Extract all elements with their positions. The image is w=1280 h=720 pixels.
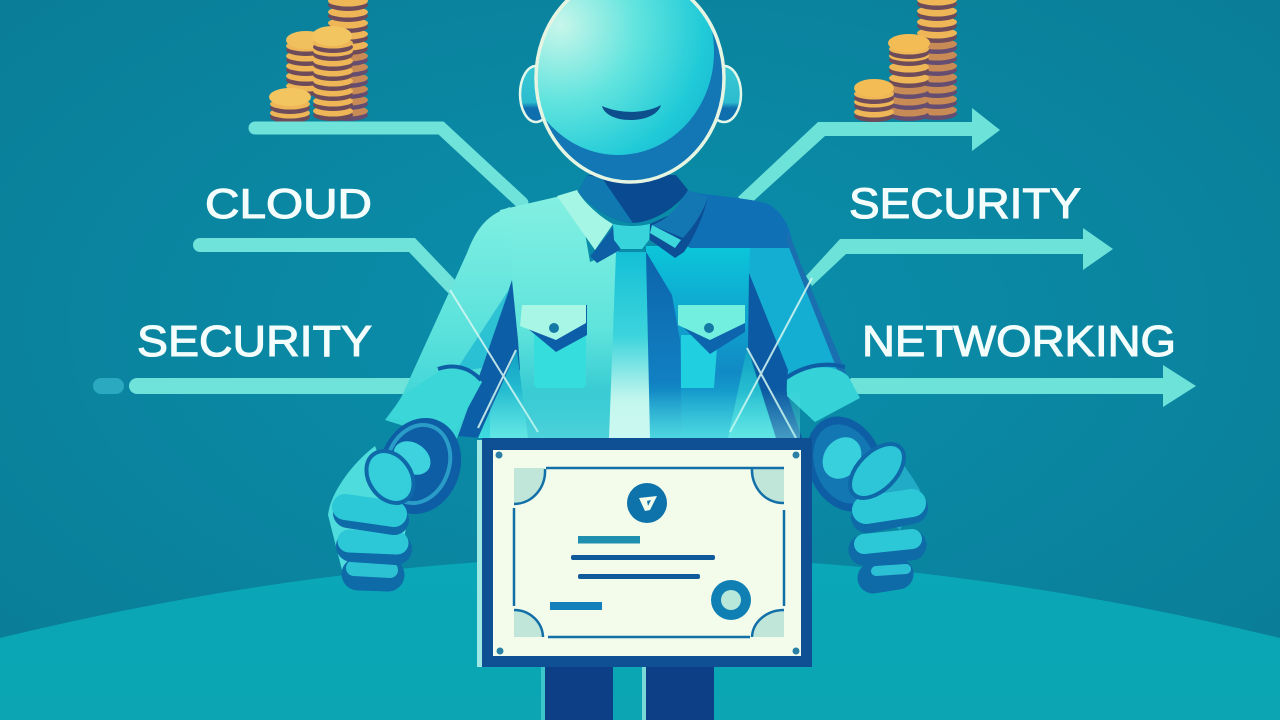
right ear (707, 66, 741, 122)
right under-arm shade (748, 273, 802, 438)
label: NETWORKING: NETWORKING (862, 317, 1176, 366)
inner border (514, 468, 784, 637)
cuff (792, 405, 898, 523)
left pocket (520, 305, 587, 388)
right lower torso fill (728, 348, 776, 438)
arrow: middle left (200, 245, 452, 287)
arrow: lower left (129, 378, 424, 394)
mouth (602, 105, 661, 120)
neck (578, 175, 688, 223)
certificate frame edge (477, 440, 483, 667)
left lower sleeve (388, 369, 482, 430)
thumb (840, 434, 914, 508)
certificate (477, 438, 812, 667)
right lower sleeve (787, 367, 860, 422)
torso right (646, 246, 752, 440)
finger 2 (864, 539, 912, 550)
right cuff crease (786, 365, 845, 378)
ground hill (0, 556, 1280, 720)
left arm (385, 207, 512, 442)
left cuff crease (438, 366, 481, 380)
finger 1 (866, 503, 912, 517)
arrow: top left (255, 128, 522, 203)
seal (711, 580, 751, 620)
tie shade (645, 250, 682, 438)
right shoulder (668, 191, 792, 248)
label: SECURITY right: SECURITY (849, 180, 1081, 228)
cuff (366, 406, 474, 526)
head (522, 0, 725, 183)
right pocket (678, 305, 745, 388)
label: CLOUD: CLOUD (205, 180, 372, 227)
certificate frame (482, 438, 812, 667)
coin stacks: left (269, 0, 368, 123)
figure (328, 0, 920, 720)
text line 1 (578, 536, 640, 544)
tie (609, 252, 650, 438)
right collar (650, 190, 708, 258)
back of hand (328, 446, 408, 570)
glow above certificate (490, 390, 800, 440)
arrow: lower right (847, 365, 1196, 407)
finger 3 (873, 569, 906, 578)
corner screws (496, 452, 800, 654)
center knot (613, 224, 650, 249)
text line 2 (571, 555, 715, 560)
label: SECURITY left: SECURITY (137, 317, 372, 366)
arrow: middle right (806, 228, 1113, 286)
certificate paper (493, 450, 801, 656)
right hand (792, 405, 920, 578)
emblem (627, 483, 667, 523)
legs (541, 664, 714, 720)
arrow: top right (738, 108, 1000, 206)
arrow: lower left ghost segment (93, 378, 124, 394)
coin stacks: right (854, 0, 957, 122)
back of hand (860, 445, 920, 530)
finger 1 (345, 507, 394, 520)
left arm mid tone (455, 288, 510, 372)
corner tints (514, 468, 784, 637)
thumb (357, 442, 423, 512)
left ear (520, 66, 552, 122)
right sleeve (749, 248, 858, 420)
left hand (328, 406, 474, 575)
left collar (557, 190, 620, 263)
crossing highlight lines (450, 278, 812, 438)
right sleeve outer shade (786, 232, 848, 378)
finger 2 (349, 541, 397, 549)
finger 3 (354, 568, 390, 575)
torso left (500, 192, 618, 440)
wrist (387, 434, 437, 482)
text line 3 (578, 574, 700, 579)
left lower torso fill (478, 350, 528, 438)
left under-arm shade (458, 280, 520, 438)
wrist (815, 430, 869, 486)
signature line (550, 602, 602, 610)
